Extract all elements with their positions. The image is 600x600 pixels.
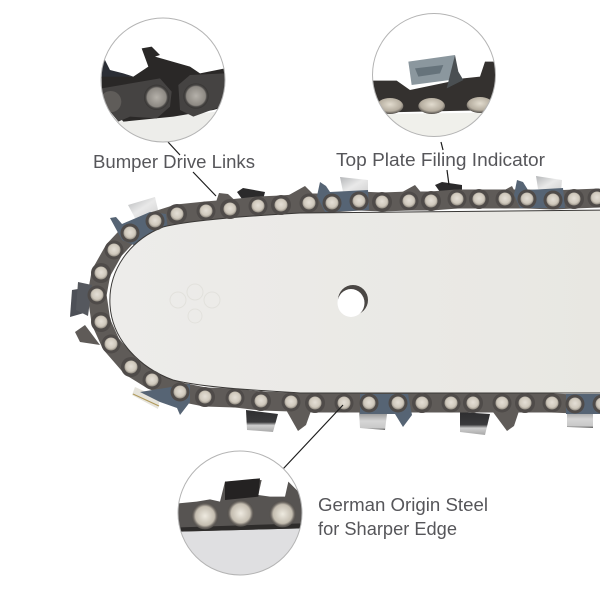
bar mounting hole (338, 285, 368, 317)
magnifier: german origin steel (178, 451, 302, 577)
cutter teeth (70, 176, 593, 435)
depth gauges and tie straps (75, 185, 520, 431)
rivet heads (90, 192, 600, 410)
rivet plates (88, 188, 600, 414)
leader line: top plate filing indicator (441, 142, 449, 185)
leader line: german origin steel (283, 405, 343, 469)
blue tinted cutter links (110, 180, 600, 427)
magnifier: top plate filing indicator (372, 14, 496, 143)
label: german origin steel: German Origin Steel (318, 494, 488, 515)
label: german origin steel: for Sharper Edge (318, 518, 457, 539)
guide bar (110, 210, 600, 393)
chain band (97, 198, 600, 404)
guide bar and saw chain (70, 176, 600, 435)
label: german origin steel (318, 494, 488, 539)
label: bumper drive links: Bumper Drive Links (93, 151, 255, 172)
bar watermark logo (170, 284, 220, 323)
magnifier: bumper drive links (100, 18, 225, 143)
leader line: bumper drive links (168, 142, 216, 196)
label: top plate filing indicator: Top Plate Filing Indicator (336, 149, 545, 170)
